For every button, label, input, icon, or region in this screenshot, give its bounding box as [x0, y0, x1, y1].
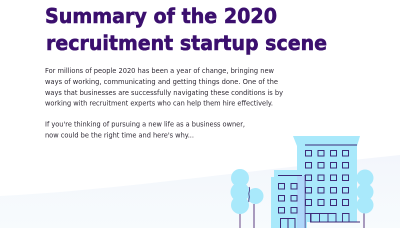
intro paragraph: working with recruitment experts who can help them hire effectively. [45, 98, 273, 108]
intro paragraph: ways of working, communicating and getting things done. One of the [45, 77, 278, 86]
closing paragraph: If you're thinking of pursuing a new life as a business owner, [45, 120, 245, 128]
title: Summary of the 2020 [45, 4, 277, 28]
left small tree [248, 187, 264, 228]
closing paragraph [45, 120, 245, 140]
low office building [271, 170, 305, 228]
title [45, 4, 327, 55]
right tree [355, 170, 374, 228]
title: recruitment startup scene [46, 31, 327, 55]
left large tree [230, 169, 250, 228]
ground floor doors [305, 214, 360, 222]
closing paragraph: now could be the right time and here's why... [45, 130, 194, 140]
tall office building [293, 136, 360, 228]
intro paragraph [45, 66, 284, 108]
intro paragraph: ways that businesses are successfully navigating these conditions is by [45, 88, 284, 97]
intro paragraph: For millions of people 2020 has been a year of change, bringing new [45, 66, 274, 75]
background hill [0, 155, 400, 228]
